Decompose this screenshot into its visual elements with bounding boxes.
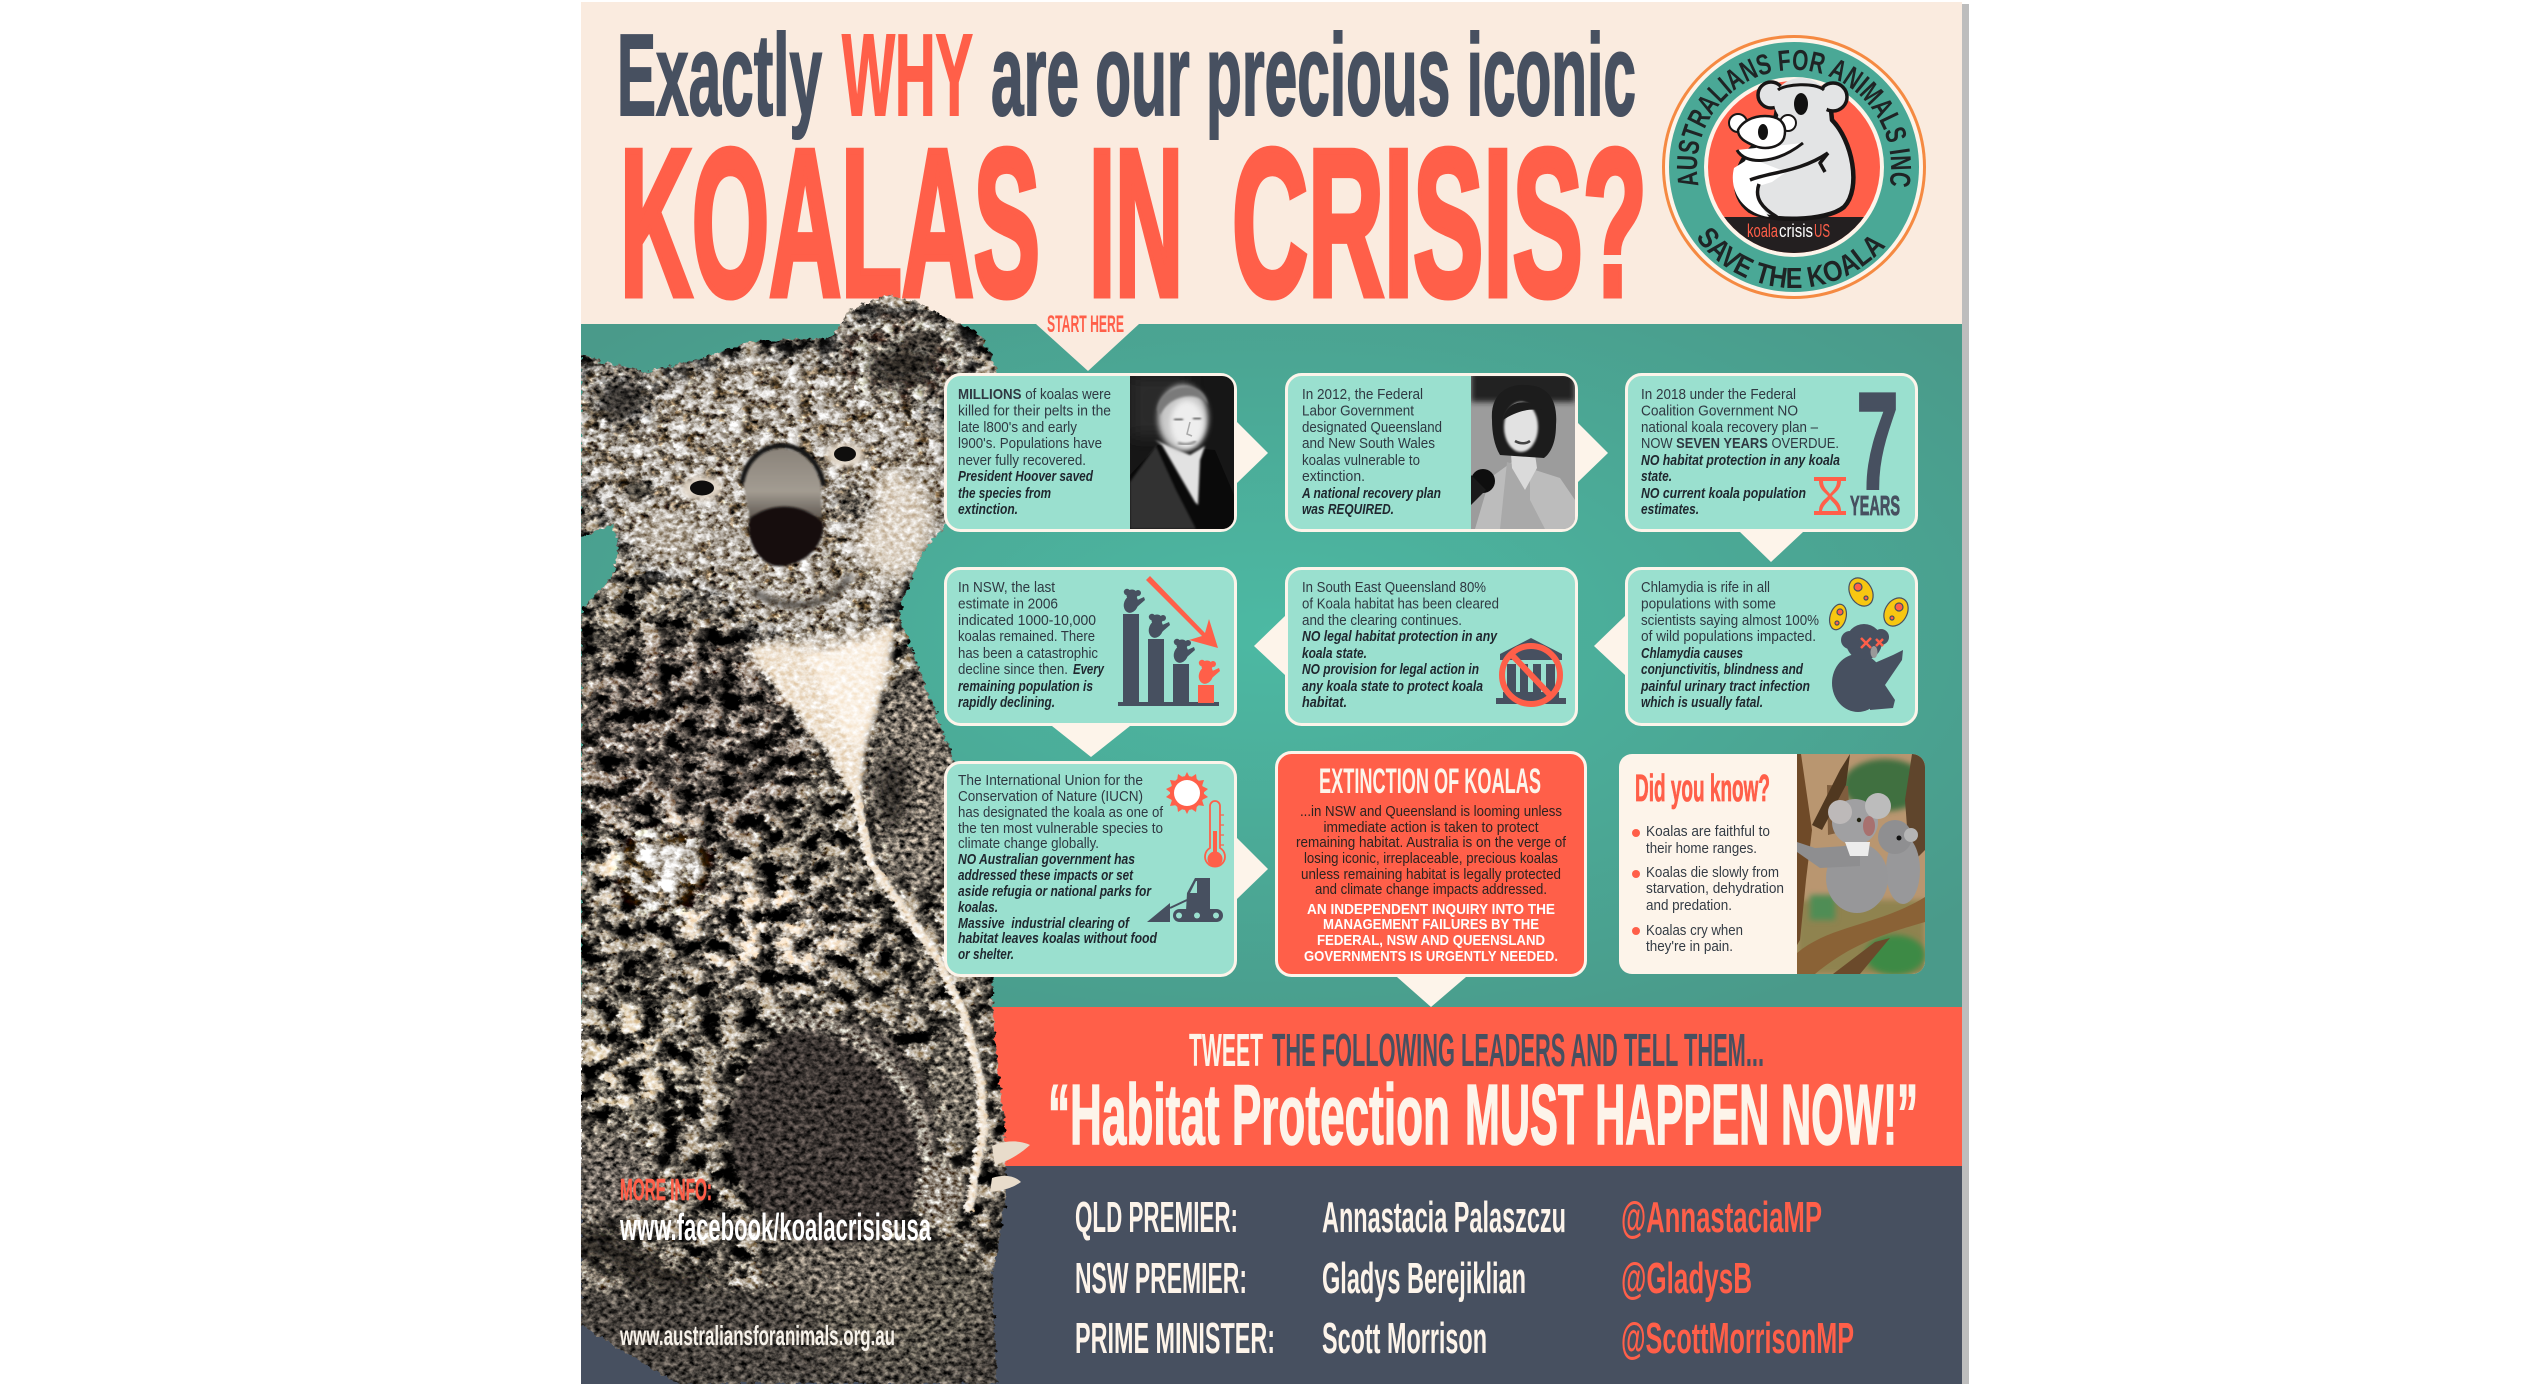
- text: south east Queensland: and the clearing continues.: [1302, 612, 1462, 629]
- portrait: Julia Gillard: [1471, 372, 1575, 529]
- text: Labor government: A national recovery plan: [1301, 485, 1441, 502]
- logo ring text: AUSTRALIANS FOR ANIMALS INC: [1676, 50, 1912, 187]
- text: Labor government: was REQUIRED.: [1302, 501, 1394, 518]
- row: QLD premier: @AnnastaciaMP: [1621, 1193, 1822, 1242]
- row: prime minister: Scott Morrison: [1322, 1314, 1487, 1363]
- koala claws: [990, 1141, 1030, 1192]
- years label: YEARS: [1850, 490, 1900, 521]
- text: NSW decline: remaining population is: [958, 678, 1093, 695]
- text: Hoover: the species from: [958, 485, 1051, 502]
- row: NSW premier: @GladysB: [1621, 1254, 1752, 1303]
- text: south east Queensland: NO legal habitat protection in any: [1302, 628, 1498, 645]
- leaders band: [581, 1166, 1962, 1384]
- row: prime minister: @ScottMorrisonMP: [1621, 1314, 1854, 1363]
- text: NSW decline: decline since then.: [958, 661, 1068, 678]
- panel: did you know: [1619, 754, 1927, 975]
- text: inquiry call: FEDERAL, NSW AND QUEENSLAND: [1317, 932, 1545, 949]
- logo ring text: SAVE THE KOALA: [1698, 228, 1886, 288]
- text: NSW decline: [958, 579, 1104, 711]
- start here pointer: [1036, 311, 1139, 371]
- text: NSW decline: koalas remained. There: [958, 628, 1095, 645]
- text: IUCN climate: addressed these impacts or set: [958, 867, 1134, 884]
- text: chlamydia: populations with some: [1641, 596, 1776, 612]
- text: chlamydia: Chlamydia is rife in all: [1641, 579, 1770, 596]
- text: chlamydia: Chlamydia causes: [1641, 645, 1743, 662]
- text: extinction body: and climate change impacts addressed.: [1315, 881, 1547, 898]
- text: Labor government: extinction.: [1302, 468, 1365, 485]
- photo: koala and joey on branch: [1797, 754, 1927, 975]
- text: inquiry call: MANAGEMENT FAILURES BY THE: [1323, 916, 1539, 933]
- icon: prohibited courthouse: [1496, 638, 1566, 704]
- text: Labor government: and New South Wales: [1302, 435, 1435, 452]
- text: seven years: NO current koala population: [1641, 485, 1806, 502]
- arrow: box 3 down: [1740, 532, 1803, 562]
- text: seven years: national koala recovery plan –: [1641, 419, 1819, 436]
- start here pointer: START HERE: [1047, 311, 1124, 338]
- koala face: [682, 443, 864, 605]
- text: chlamydia: painful urinary tract infection: [1640, 678, 1810, 695]
- tweet heading: [1189, 1024, 1764, 1076]
- text: MUST HAPPEN NOW!”: [1465, 1068, 1918, 1163]
- arrow: box 7 to extinction box: [1237, 838, 1268, 899]
- text: seven years: Coalition Government NO: [1641, 402, 1798, 420]
- text: south east Queensland: any koala state to protect koala: [1302, 678, 1483, 695]
- text: south east Queensland: of Koala habitat has been cleared: [1302, 596, 1499, 612]
- title line two: KOALAS: [620, 107, 1040, 340]
- text: Hoover: extinction.: [958, 501, 1018, 518]
- arrow: box 6 down: [1052, 726, 1130, 757]
- text: Labor government: In 2012, the Federal: [1302, 386, 1423, 403]
- logo wordmark: koala: [1747, 221, 1779, 241]
- text: IUCN climate: climate change globally.: [958, 835, 1099, 852]
- text: extinction body: ...in NSW and Queensland is looming unless: [1300, 803, 1562, 820]
- text: Labor government: koalas vulnerable to: [1302, 452, 1420, 469]
- text: seven years: NOW SEVEN YEARS OVERDUE.: [1641, 435, 1839, 452]
- portrait: President Hoover: [1130, 376, 1234, 529]
- text: NSW decline: indicated 1000-10,000: [958, 612, 1096, 629]
- heading: extinction: EXTINCTION OF KOALAS: [1319, 762, 1541, 801]
- big seven: 7: [1857, 365, 1898, 517]
- bullet list: Koalas are faithful to: [1646, 823, 1770, 840]
- text: south east Queensland: [1302, 579, 1499, 711]
- text: Hoover: never fully recovered.: [958, 452, 1086, 469]
- text: MORE INFO:: [620, 1172, 712, 1207]
- icon: bulldozer: [1147, 878, 1223, 922]
- arrow: box 1 to box 2: [1237, 422, 1268, 483]
- box 3: seven years: [1626, 365, 1916, 530]
- text: Hoover: killed for their pelts in the: [958, 402, 1111, 420]
- row: NSW premier: [1075, 1254, 1752, 1303]
- page shadow: [1962, 4, 1969, 1384]
- text: Hoover: late l800's and early: [958, 419, 1077, 436]
- row: NSW premier: NSW PREMIER:: [1075, 1254, 1247, 1303]
- text: south east Queensland: NO provision for legal action in: [1302, 661, 1479, 678]
- arrow: extinction box down: [1397, 977, 1466, 1007]
- arrow: box 5 to box 6: [1254, 616, 1285, 675]
- header panel: [581, 2, 1962, 325]
- text: NSW decline: rapidly declining.: [958, 694, 1055, 711]
- row: QLD premier: [1075, 1193, 1822, 1242]
- icon: sun: [1166, 772, 1208, 814]
- tweet heading: TWEET: [1189, 1024, 1263, 1076]
- box 8: extinction of koalas: [1276, 752, 1586, 976]
- text: extinction body: remaining habitat. Australia is on the verge of: [1296, 834, 1567, 851]
- icon: sick koala: [1832, 624, 1903, 712]
- text: NSW decline: estimate in 2006: [958, 596, 1058, 612]
- text: extinction body: unless remaining habitat is legally protected: [1301, 866, 1561, 883]
- bullet list: they're in pain.: [1646, 938, 1733, 955]
- title line one: are our precious iconic: [991, 10, 1636, 140]
- text: seven years: state.: [1641, 468, 1672, 485]
- bullet list: Koalas cry when: [1646, 922, 1743, 939]
- bullet list: [1632, 823, 1784, 955]
- text: IUCN climate: has designated the koala as one of: [958, 804, 1164, 821]
- row: QLD premier: QLD PREMIER:: [1075, 1193, 1238, 1242]
- logo black base: [1724, 217, 1864, 253]
- box 6: NSW decline: [946, 568, 1236, 724]
- text: NSW decline: Every: [1073, 661, 1104, 678]
- slogan: “Habitat Protection: [1048, 1068, 1450, 1163]
- tweet band: [980, 1007, 1962, 1166]
- row: QLD premier: Annastacia Palaszczu: [1322, 1193, 1566, 1242]
- box 2: Labor government: [1286, 372, 1576, 530]
- text: chlamydia: [1640, 579, 1819, 711]
- text: IUCN climate: aside refugia or national parks for: [958, 883, 1152, 900]
- row: NSW premier: Gladys Berejiklian: [1322, 1254, 1526, 1303]
- text: extinction body: immediate action is taken to protect: [1324, 819, 1539, 836]
- bullet list: starvation, dehydration: [1646, 880, 1784, 897]
- text: Labor government: designated Queensland: [1302, 419, 1442, 436]
- text: seven years: NO habitat protection in any koala: [1641, 452, 1840, 469]
- bullet list: and predation.: [1646, 897, 1732, 914]
- text: IUCN climate: Conservation of Nature (IUCN): [958, 788, 1143, 805]
- box 7: IUCN climate: [946, 762, 1236, 976]
- bullet list: Koalas die slowly from: [1646, 864, 1779, 881]
- text: THE FOLLOWING LEADERS AND TELL THEM...: [1272, 1024, 1764, 1076]
- text: chlamydia: conjunctivitis, blindness and: [1641, 661, 1804, 678]
- website link: www.australiansforanimals.org.au: [619, 1320, 895, 1351]
- text: chlamydia: of wild populations impacted.: [1641, 628, 1816, 645]
- text: IUCN climate: the ten most vulnerable species to: [958, 820, 1163, 837]
- arrow: box 2 to box 3: [1578, 423, 1608, 482]
- title line one: Exactly: [617, 10, 822, 140]
- text: extinction body: losing iconic, irreplaceable, precious koalas: [1304, 850, 1558, 867]
- icon: bacteria: [1827, 574, 1913, 632]
- text: Labor government: [1301, 386, 1442, 518]
- bullet list: their home ranges.: [1646, 840, 1757, 857]
- text: Hoover: MILLIONS of koalas were: [958, 386, 1111, 403]
- text: IUCN climate: Massive industrial clearing of: [958, 915, 1131, 932]
- logo wordmark: [1747, 221, 1830, 241]
- title line one: [617, 10, 1636, 140]
- text: south east Queensland: habitat.: [1302, 694, 1347, 711]
- text: Labor government: Labor Government: [1302, 402, 1415, 420]
- text: IUCN climate: koalas.: [958, 899, 998, 916]
- logo wordmark: crisis: [1779, 221, 1813, 241]
- title line one: WHY: [842, 10, 973, 140]
- title line two: CRISIS?: [1232, 107, 1647, 340]
- text: extinction body: [1296, 803, 1567, 898]
- text: inquiry call: GOVERNMENTS IS URGENTLY NEEDED.: [1304, 948, 1558, 965]
- icon: thermometer: [1205, 801, 1225, 867]
- text: seven years: In 2018 under the Federal: [1641, 386, 1796, 403]
- text: IUCN climate: [958, 772, 1164, 963]
- logo koala: [1729, 78, 1853, 219]
- text: inquiry call: AN INDEPENDENT INQUIRY INTO THE: [1307, 901, 1555, 918]
- text: inquiry call: [1304, 901, 1558, 965]
- row: prime minister: [1075, 1314, 1854, 1363]
- text: south east Queensland: koala state.: [1302, 645, 1367, 662]
- chart: falling koala population: [1118, 576, 1220, 706]
- box 1: Hoover: [946, 374, 1236, 530]
- logo wordmark: US: [1814, 221, 1830, 241]
- leaders table: [1075, 1193, 1854, 1363]
- text: chlamydia: which is usually fatal.: [1641, 694, 1763, 711]
- arrow: box 4 to box 5: [1594, 616, 1625, 675]
- teal panel: [581, 324, 1962, 1008]
- text: IUCN climate: habitat leaves koalas without food: [958, 930, 1158, 947]
- text: seven years: [1641, 386, 1840, 518]
- text: IUCN climate: or shelter.: [958, 946, 1014, 963]
- text: NSW decline: In NSW, the last: [958, 579, 1056, 596]
- text: Hoover: l900's. Populations have: [958, 435, 1102, 452]
- text: seven years: estimates.: [1641, 501, 1699, 518]
- icon: hourglass: [1814, 477, 1846, 515]
- text: IUCN climate: NO Australian government has: [958, 851, 1135, 868]
- text: Hoover: President Hoover saved: [958, 468, 1094, 485]
- text: south east Queensland: In South East Queensland 80%: [1302, 579, 1486, 596]
- row: prime minister: PRIME MINISTER:: [1075, 1314, 1275, 1363]
- text: chlamydia: scientists saying almost 100%: [1641, 612, 1819, 629]
- logo ring text: [1676, 50, 1912, 288]
- text: NSW decline: has been a catastrophic: [958, 645, 1098, 662]
- title line two: IN: [1089, 107, 1183, 340]
- box 5: south east Queensland: [1286, 568, 1576, 724]
- text: Hoover: [958, 386, 1111, 518]
- facebook link: www.facebook/koalacrisisusa: [619, 1207, 931, 1249]
- box 4: chlamydia: [1626, 568, 1916, 724]
- text: IUCN climate: The International Union for the: [958, 772, 1143, 789]
- koala photograph: [565, 280, 1040, 1384]
- panel: did you know: Did you know?: [1635, 768, 1770, 810]
- logo: Australians for Animals: [1662, 35, 1926, 299]
